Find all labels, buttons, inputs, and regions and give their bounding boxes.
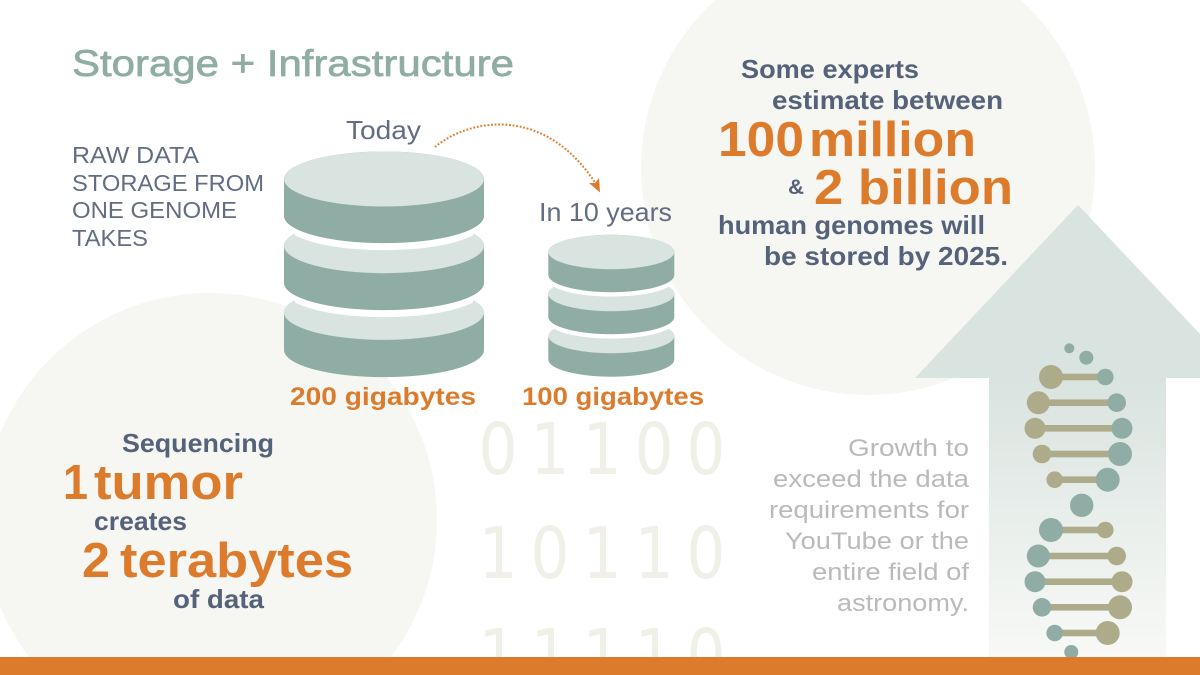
callout: expert estimate: 2 billion bbox=[814, 161, 1013, 215]
callout: expert estimate: estimate between bbox=[772, 85, 1003, 115]
callout: tumor sequencing bbox=[63, 428, 353, 614]
text block: raw data storage: ONE GENOME bbox=[72, 197, 237, 223]
text block: growth comparison: astronomy. bbox=[837, 590, 969, 617]
callout: expert estimate: Some experts bbox=[741, 54, 919, 84]
callout: tumor sequencing: terabytes bbox=[120, 534, 353, 588]
background circle: top right bbox=[641, 0, 1095, 395]
callout: expert estimate bbox=[718, 54, 1013, 271]
footer bar bbox=[0, 657, 1200, 675]
text block: raw data storage bbox=[72, 142, 264, 251]
text block: raw data storage: STORAGE FROM bbox=[72, 170, 264, 196]
callout: expert estimate: 100 bbox=[718, 113, 804, 167]
callout: expert estimate: & bbox=[788, 176, 804, 199]
callout: expert estimate: human genomes will bbox=[718, 210, 985, 240]
background circle: bottom left bbox=[0, 293, 437, 675]
text block: growth comparison: exceed the data bbox=[773, 466, 970, 493]
text block: growth comparison: requirements for bbox=[769, 497, 969, 524]
callout: tumor sequencing: creates bbox=[94, 506, 187, 536]
label: in 10 years: In 10 years bbox=[539, 197, 672, 227]
label: 100 gigabytes: 100 gigabytes bbox=[522, 383, 704, 411]
text block: raw data storage: RAW DATA bbox=[72, 142, 200, 168]
callout: expert estimate: be stored by 2025. bbox=[764, 241, 1008, 271]
dotted arrow: today to 10 years bbox=[435, 124, 600, 192]
callout: tumor sequencing: 2 bbox=[82, 534, 110, 588]
callout: tumor sequencing: of data bbox=[173, 584, 265, 614]
icon: small storage cylinder stack bbox=[548, 235, 674, 377]
text block: growth comparison bbox=[769, 435, 970, 617]
title: Storage + Infrastructure bbox=[72, 43, 514, 84]
text block: growth comparison: Growth to bbox=[848, 435, 969, 462]
binary digits: clipped third row bbox=[479, 614, 725, 657]
binary digits backdrop bbox=[479, 409, 725, 595]
callout: tumor sequencing: 1 bbox=[63, 456, 88, 510]
binary digits backdrop: 10110 bbox=[479, 513, 725, 595]
callout: expert estimate: million bbox=[809, 113, 976, 167]
text block: growth comparison: YouTube or the bbox=[785, 528, 969, 555]
icon: large storage cylinder stack bbox=[284, 152, 484, 377]
text block: growth comparison: entire field of bbox=[812, 559, 969, 586]
growth arrow bbox=[915, 205, 1200, 657]
callout: tumor sequencing: tumor bbox=[94, 456, 243, 510]
label: today: Today bbox=[346, 115, 421, 145]
text block: raw data storage: TAKES bbox=[72, 225, 148, 251]
callout: tumor sequencing: Sequencing bbox=[122, 428, 274, 458]
binary digits backdrop: 01100 bbox=[479, 409, 725, 491]
label: 200 gigabytes: 200 gigabytes bbox=[290, 383, 476, 411]
icon: DNA helix bbox=[1024, 343, 1132, 659]
